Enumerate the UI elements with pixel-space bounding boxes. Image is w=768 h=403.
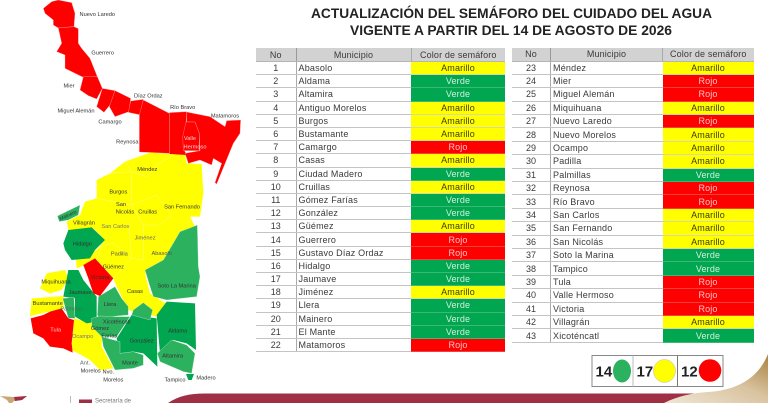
table: municipalities 1 to 22: Verde [446, 169, 470, 179]
table: municipalities 1 to 22: Aldama [298, 76, 330, 86]
table: municipalities 23 to 43: San Fernando [553, 223, 612, 233]
red municipalities [31, 258, 113, 353]
table: municipalities 1 to 22: Ciudad Madero [298, 169, 363, 179]
southern labels: Padilla [111, 252, 129, 258]
table: municipalities 1 to 22: Amarillo [441, 129, 475, 139]
table: municipalities 23 to 43: 23 [526, 63, 536, 73]
northern labels: Reynosa [116, 140, 139, 146]
table: municipalities 23 to 43: Villagrán [553, 317, 590, 327]
northern labels: Matamoros [211, 113, 239, 119]
table: municipalities 1 to 22: Amarillo [441, 116, 475, 126]
table: municipalities 23 to 43: 29 [526, 143, 536, 153]
southern labels: Gómez [91, 326, 109, 332]
table: municipalities 23 to 43: Color de semáforo [670, 49, 747, 59]
table: municipalities 1 to 22: Llera [298, 300, 320, 310]
table: municipalities 23 to 43: 43 [526, 330, 536, 340]
title: VIGENTE A PARTIR DEL 14 DE AGOSTO DE 2026 [350, 23, 672, 38]
southern labels: Jiménez [134, 235, 156, 241]
southern labels: Ocampo [72, 334, 93, 340]
table: municipalities 1 to 22: Amarillo [441, 155, 475, 165]
table: municipalities 1 to 22: Gustavo Díaz Ordaz [298, 248, 384, 258]
table: municipalities 1 to 22: 19 [271, 300, 281, 310]
southern labels: Altamira [162, 354, 184, 360]
table: municipalities 23 to 43: San Nicolás [553, 237, 603, 247]
table: municipalities 1 to 22: 7 [273, 142, 278, 152]
northern labels: Méndez [137, 167, 158, 173]
table: municipalities 1 to 22: Cruillas [298, 182, 330, 192]
green count [596, 360, 631, 382]
table: municipalities 23 to 43: Soto la Marina [553, 250, 614, 260]
southern labels: Nvo. [103, 370, 115, 376]
table: municipalities 1 to 22: Verde [446, 208, 470, 218]
table: municipalities 1 to 22: Verde [446, 195, 470, 205]
table: municipalities 1 to 22: El Mante [298, 327, 336, 337]
table: municipalities 1 to 22: 15 [271, 248, 281, 258]
table: municipalities 1 to 22: 14 [271, 235, 281, 245]
table: municipalities 23 to 43: Rojo [698, 197, 718, 207]
southern labels: Tampico [164, 377, 186, 383]
southern labels: Cruillas [138, 210, 157, 216]
table: municipalities 1 to 22: 1 [273, 63, 278, 73]
table: municipalities 23 to 43: Rojo [698, 76, 718, 86]
table: municipalities 23 to 43: Amarillo [691, 237, 725, 247]
table: municipalities 23 to 43: 32 [526, 183, 536, 193]
table: municipalities 23 to 43: Amarillo [691, 130, 725, 140]
table: municipalities 23 to 43: 36 [526, 237, 536, 247]
table: municipalities 23 to 43: Miguel Alemán [553, 89, 615, 99]
table: municipalities 1 to 22: Altamira [298, 89, 333, 99]
northern labels: Mier [64, 84, 75, 90]
table: municipalities 1 to 22: Verde [446, 76, 470, 86]
table: municipalities 1 to 22: 16 [271, 261, 281, 271]
northern labels: Miguel Alemán [57, 109, 95, 115]
table: municipalities 1 to 22: Verde [446, 274, 470, 284]
table: municipalities 1 to 22: Verde [446, 89, 470, 99]
table: municipalities 1 to 22: 21 [271, 327, 281, 337]
table: municipalities 1 to 22: Verde [446, 327, 470, 337]
southern labels: Mante [122, 360, 138, 366]
yellow count: 17 [636, 364, 653, 380]
southern labels: Soto La Marina [157, 284, 197, 290]
southern labels: Güémez [103, 265, 124, 271]
table: municipalities 23 to 43: 39 [526, 277, 536, 287]
table: municipalities 1 to 22: Jiménez [298, 287, 333, 297]
northern labels: Burgos [109, 189, 127, 195]
table: municipalities 23 to 43: Municipio [587, 49, 626, 59]
table: municipalities 1 to 22: Amarillo [441, 287, 475, 297]
table: municipalities 23 to 43: Amarillo [691, 143, 725, 153]
southern labels: Morelos [81, 368, 101, 374]
southern labels: Jaumave [69, 290, 91, 296]
northern labels: Guerrero [91, 51, 114, 57]
table: municipalities 1 to 22: Color de semáforo [420, 50, 497, 60]
table: municipalities 23 to 43: Nuevo Morelos [553, 130, 616, 140]
table: municipalities 23 to 43: Rojo [698, 277, 718, 287]
northern labels: Valle [184, 136, 196, 142]
red count [681, 359, 721, 382]
table: municipalities 23 to 43: Rojo [698, 304, 718, 314]
table: municipalities 23 to 43: Amarillo [691, 223, 725, 233]
table: municipalities 1 to 22: 22 [271, 340, 281, 350]
table: municipalities 23 to 43: 24 [526, 76, 536, 86]
southern labels: Abasolo [151, 251, 172, 257]
table: municipalities 1 to 22: 17 [271, 274, 281, 284]
table: municipalities 23 to 43: 38 [526, 264, 536, 274]
table: municipalities 23 to 43: Tampico [553, 264, 588, 274]
table: municipalities 1 to 22: Amarillo [441, 221, 475, 231]
southern labels: Madero [196, 376, 216, 382]
table: municipalities 23 to 43: Rojo [698, 89, 718, 99]
table: municipalities 23 to 43: No [525, 49, 537, 59]
southern labels [33, 202, 216, 383]
southern labels: Mainero [59, 209, 78, 222]
table: municipalities 23 to 43: Rojo [698, 183, 718, 193]
table: municipalities 1 to 22: Camargo [298, 142, 337, 152]
table: municipalities 23 to 43: Valle Hermoso [553, 290, 614, 300]
table: municipalities 23 to 43: Río Bravo [553, 197, 595, 207]
table: municipalities 23 to 43: Rojo [698, 290, 718, 300]
title: ACTUALIZACIÓN DEL SEMÁFORO DEL CUIDADO DEL AGUA [311, 6, 712, 21]
southern labels: Farías [101, 334, 118, 340]
southern labels: Xicoténcatl [103, 320, 131, 326]
table: municipalities 1 to 22: 12 [271, 208, 281, 218]
table: municipalities 23 to 43: Tula [553, 277, 571, 287]
southern labels: Palmillas [60, 307, 83, 313]
southern labels: Aldama [168, 329, 188, 335]
southern labels: San Carlos [101, 224, 129, 230]
table: municipalities 23 to 43: Padilla [553, 156, 581, 166]
table: municipalities 1 to 22: 20 [271, 314, 281, 324]
northern labels: Hermoso [184, 144, 206, 150]
table: municipalities 23 to 43: Reynosa [553, 183, 590, 193]
southern labels: Hidalgo [73, 241, 92, 247]
table: municipalities 23 to 43 [512, 48, 754, 343]
table: municipalities 23 to 43: Verde [696, 170, 720, 180]
southern labels: San Fernando [164, 205, 200, 211]
table: municipalities 23 to 43: Amarillo [691, 156, 725, 166]
table: municipalities 1 to 22: Rojo [448, 235, 468, 245]
southern labels: Tula [50, 327, 62, 333]
table: municipalities 23 to 43: Mier [553, 76, 571, 86]
table: municipalities 1 to 22: Casas [298, 155, 325, 165]
table: municipalities 23 to 43: 27 [526, 116, 536, 126]
yellow count [636, 360, 676, 382]
table: municipalities 1 to 22: No [270, 50, 282, 60]
table: municipalities 23 to 43: 33 [526, 197, 536, 207]
table: municipalities 1 to 22: 5 [273, 116, 278, 126]
table: municipalities 1 to 22: 13 [271, 221, 281, 231]
green municipalities [63, 227, 196, 380]
table: municipalities 1 to 22: Jaumave [298, 274, 336, 284]
northern labels: Nuevo Laredo [80, 12, 115, 18]
northern labels: Camargo [98, 119, 122, 125]
table: municipalities 23 to 43: 40 [526, 290, 536, 300]
southern labels: Victoria [91, 275, 110, 281]
table: municipalities 1 to 22: Mainero [298, 314, 332, 324]
table: municipalities 23 to 43: 34 [526, 210, 536, 220]
table: municipalities 23 to 43: 35 [526, 223, 536, 233]
table: municipalities 23 to 43: Palmillas [553, 170, 591, 180]
table: municipalities 23 to 43: Verde [696, 250, 720, 260]
table: municipalities 23 to 43: 25 [526, 89, 536, 99]
table: municipalities 1 to 22: Burgos [298, 116, 328, 126]
table: municipalities 23 to 43: Xicoténcatl [553, 330, 599, 340]
southern labels: Nicolás [116, 210, 134, 216]
northern labels: Río Bravo [170, 105, 195, 111]
table: municipalities 1 to 22: Bustamante [298, 129, 349, 139]
table: municipalities 23 to 43: 28 [526, 130, 536, 140]
table: municipalities 1 to 22: 9 [273, 169, 278, 179]
table: municipalities 23 to 43: Verde [696, 264, 720, 274]
southern labels: San [116, 202, 126, 208]
northern labels: Díaz Ordaz [134, 93, 163, 99]
northern red municipalities [43, 0, 241, 184]
yellow borders [97, 155, 173, 278]
southern labels: Ant. [80, 361, 90, 367]
table: municipalities 1 to 22: Verde [446, 261, 470, 271]
table: municipalities 1 to 22: Verde [446, 314, 470, 324]
table: municipalities 1 to 22: 8 [273, 155, 278, 165]
table: municipalities 1 to 22: Antiguo Morelos [298, 103, 367, 113]
table: municipalities 1 to 22: Abasolo [298, 63, 332, 73]
table: municipalities 23 to 43: Victoria [553, 304, 584, 314]
table: municipalities 1 to 22: Amarillo [441, 63, 475, 73]
table: municipalities 23 to 43: Miquihuana [553, 103, 602, 113]
table: municipalities 1 to 22: Rojo [448, 248, 468, 258]
map of municipalities [30, 0, 241, 383]
central and southern municipalities [30, 153, 203, 380]
table: municipalities 1 to 22: 18 [271, 287, 281, 297]
table: municipalities 1 to 22: 2 [273, 76, 278, 86]
table: municipalities 23 to 43: 31 [526, 170, 536, 180]
table: municipalities 23 to 43: Nuevo Laredo [553, 116, 612, 126]
table: municipalities 23 to 43: 26 [526, 103, 536, 113]
table: municipalities 23 to 43: 37 [526, 250, 536, 260]
table: municipalities 1 to 22: 11 [271, 195, 280, 205]
table: municipalities 1 to 22: Guerrero [298, 235, 336, 245]
table: municipalities 1 to 22: Rojo [448, 340, 468, 350]
southern labels: Villagrán [73, 220, 95, 226]
table: municipalities 1 to 22: Amarillo [441, 182, 475, 192]
table: municipalities 23 to 43: Amarillo [691, 63, 725, 73]
table: municipalities 1 to 22: 4 [273, 103, 278, 113]
table: municipalities 23 to 43: Amarillo [691, 210, 725, 220]
southern labels: Casas [127, 289, 143, 295]
southern labels: Llera [104, 302, 117, 308]
table: municipalities 1 to 22: Municipio [334, 50, 373, 60]
table: municipalities 1 to 22: Hidalgo [298, 261, 330, 271]
table: municipalities 1 to 22: Gómez Farías [298, 195, 358, 205]
table: municipalities 1 to 22 [256, 48, 505, 352]
table: municipalities 1 to 22: Verde [446, 300, 470, 310]
table: municipalities 23 to 43: Méndez [553, 63, 586, 73]
table: municipalities 23 to 43: Amarillo [691, 317, 725, 327]
table: municipalities 1 to 22: 6 [273, 129, 278, 139]
table: municipalities 23 to 43: 41 [526, 304, 536, 314]
table: municipalities 23 to 43: Amarillo [691, 103, 725, 113]
table: municipalities 1 to 22: Rojo [448, 142, 468, 152]
red count: 12 [681, 364, 698, 380]
table: municipalities 23 to 43: 42 [526, 317, 536, 327]
southern labels: Bustamante [33, 301, 63, 307]
southern labels: Miquihuana [41, 279, 71, 285]
table: municipalities 1 to 22: Güémez [298, 221, 334, 231]
southern labels: Morelos [103, 377, 124, 383]
table: municipalities 23 to 43: Rojo [698, 116, 718, 126]
table: municipalities 23 to 43: Ocampo [553, 143, 588, 153]
table: municipalities 1 to 22: González [298, 208, 338, 218]
table: municipalities 23 to 43: San Carlos [553, 210, 600, 220]
table: municipalities 1 to 22: Amarillo [441, 103, 475, 113]
table: municipalities 23 to 43: 30 [526, 156, 536, 166]
table: municipalities 1 to 22: 10 [271, 182, 281, 192]
yellow municipalities [30, 153, 203, 370]
southern labels: González [130, 338, 154, 344]
table: municipalities 23 to 43: Verde [696, 330, 720, 340]
table: municipalities 1 to 22: Matamoros [298, 340, 345, 350]
table: municipalities 1 to 22: 3 [273, 89, 278, 99]
northern labels [57, 12, 239, 195]
green count: 14 [596, 364, 613, 380]
